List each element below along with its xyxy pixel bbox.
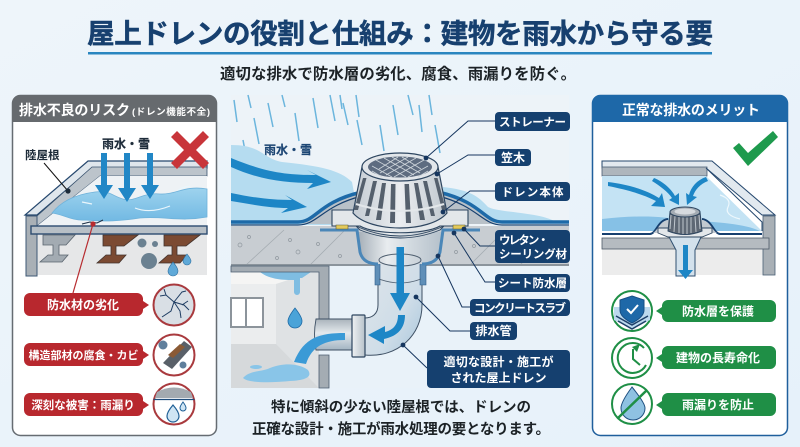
- benefit: protects waterproof layer: [612, 291, 776, 331]
- risk: corrosion and mold: [24, 334, 194, 376]
- subtitle: 適切な排水で防水層の劣化、腐食、雨漏りを防ぐ。: [220, 64, 576, 83]
- label: rain and snow: 雨水・雪: [264, 142, 312, 157]
- panel header: 排水不良のリスク: [19, 102, 130, 118]
- label: strainer: ストレーナー: [499, 116, 566, 129]
- mesh: [368, 156, 432, 178]
- crack: [82, 220, 103, 224]
- label: coping: [495, 149, 531, 166]
- flange: [332, 210, 468, 233]
- steel beams: [40, 235, 200, 263]
- coupling: [352, 315, 365, 357]
- illustration: flooded roof: [25, 161, 207, 276]
- roof edge: [706, 168, 762, 231]
- throat hatched collar: [320, 230, 480, 264]
- label: flat roof: 陸屋根: [25, 148, 60, 162]
- flange: [658, 228, 712, 237]
- label: sheet waterproofing: [495, 274, 570, 292]
- label: concrete slab: コンクリートスラブ: [474, 301, 566, 315]
- sheet underside line: [231, 196, 569, 225]
- risk: waterproof deterioration: 防水材の劣化: [47, 297, 119, 312]
- wall column: [26, 216, 37, 276]
- sealant: [336, 225, 465, 229]
- leader dots: [401, 156, 466, 347]
- flashing interior: [300, 192, 500, 224]
- inner ring: [379, 254, 421, 266]
- title: 屋上ドレンの役割と仕組み：建物を雨水から守る要: [87, 18, 713, 49]
- drops: [168, 254, 191, 276]
- puddle: [243, 364, 309, 382]
- pipe throat: [668, 235, 702, 276]
- mold: [138, 238, 158, 269]
- bottom note: [252, 399, 550, 438]
- icon: green check: [733, 131, 778, 166]
- rain arrows: [95, 153, 159, 202]
- inner bar: [356, 204, 444, 211]
- benefit: extends building life: [612, 338, 776, 378]
- slab: [602, 238, 769, 249]
- strainer slits: [354, 178, 446, 223]
- label: flat roof: [25, 148, 71, 194]
- label: strainer: [495, 112, 570, 131]
- label: drain body: [495, 182, 570, 201]
- panel: drainage risk: [12, 95, 217, 436]
- ceiling drip: [260, 272, 311, 295]
- label: sheet waterproofing: シート防水層: [498, 276, 567, 290]
- flashing fill: [653, 220, 717, 233]
- flow arrow: [368, 247, 410, 344]
- benefit: prevents leaks: 雨漏りを防止: [682, 397, 754, 412]
- surface water: [231, 145, 360, 225]
- panel header: [12, 95, 217, 122]
- ponding water: [52, 188, 207, 221]
- risk: corrosion and mold: 構造部材の腐食・カビ: [28, 348, 138, 362]
- title rule: [88, 52, 712, 54]
- room with leak: [231, 266, 329, 388]
- label: drain body: ドレン本体: [502, 185, 564, 199]
- sheet: [602, 219, 762, 234]
- flow arrows: [231, 158, 331, 213]
- panel header: [592, 95, 788, 122]
- rain streaks: [234, 95, 440, 156]
- red leader line: [73, 221, 96, 293]
- panel header: (ドレン機能不全): [132, 106, 210, 118]
- benefit: prevents leaks: [612, 384, 776, 424]
- water drop: [288, 308, 302, 328]
- flow arrows into drain: [608, 177, 708, 207]
- label: drain pipe: 排水管: [475, 323, 512, 338]
- concrete slab: [231, 226, 569, 266]
- label: urethane sealing: シーリング材: [499, 247, 568, 261]
- water outflow: [294, 333, 345, 364]
- label: rain and snow: 雨水・雪: [102, 136, 150, 151]
- panel header: 正常な排水のメリット: [622, 102, 760, 118]
- drain pipe assembly: [294, 230, 480, 364]
- icon: red cross: [171, 131, 209, 169]
- label: urethane sealing: ウレタン・: [499, 234, 549, 247]
- label: concrete slab: [470, 299, 570, 316]
- elbow and upper pipe: [365, 258, 422, 355]
- label: coping: 笠木: [501, 150, 525, 165]
- strainer and flange: [332, 153, 468, 238]
- benefit: extends building life: 建物の長寿命化: [676, 350, 760, 365]
- down arrow: [678, 245, 693, 279]
- lower room background: [329, 266, 569, 388]
- risk: serious damage, leaks: 深刻な被害：雨漏り: [31, 398, 135, 412]
- label: drain pipe: [470, 322, 517, 340]
- wall: [231, 266, 329, 388]
- label: properly designed drain: 適切な設計・施工が: [444, 354, 554, 369]
- drain body throat: [357, 232, 443, 264]
- socket hatch: [375, 262, 426, 285]
- illustration: draining roof: [602, 161, 775, 279]
- sky background: [231, 95, 569, 228]
- label: urethane sealing: [495, 230, 570, 263]
- window: [231, 298, 263, 327]
- benefit: protects waterproof layer: 防水層を保護: [682, 304, 754, 318]
- sheet waterproofing layer: [231, 192, 569, 222]
- strainer body: [353, 167, 447, 228]
- pipe ring: [379, 279, 421, 283]
- horizontal pipe: [314, 319, 352, 350]
- drain: [668, 212, 702, 234]
- slab: [31, 226, 207, 234]
- leader lines: [403, 121, 495, 368]
- bottom note: 正確な設計・施工が雨水処理の要となります。: [252, 420, 550, 438]
- label: properly designed drain: [427, 350, 570, 388]
- top rim: [362, 153, 438, 181]
- surface water right: [440, 187, 556, 222]
- risk: serious damage, leaks: [24, 384, 194, 424]
- panel frame: [592, 96, 788, 436]
- bottom note: 特に傾斜の少ない陸屋根では、ドレンの: [271, 399, 531, 416]
- panel frame: [12, 96, 216, 436]
- panel: drain cross-section: [231, 95, 570, 388]
- label: properly designed drain: された屋上ドレン: [450, 371, 546, 385]
- risk: waterproof deterioration: [24, 284, 194, 326]
- panel: proper drainage benefits: [592, 95, 788, 436]
